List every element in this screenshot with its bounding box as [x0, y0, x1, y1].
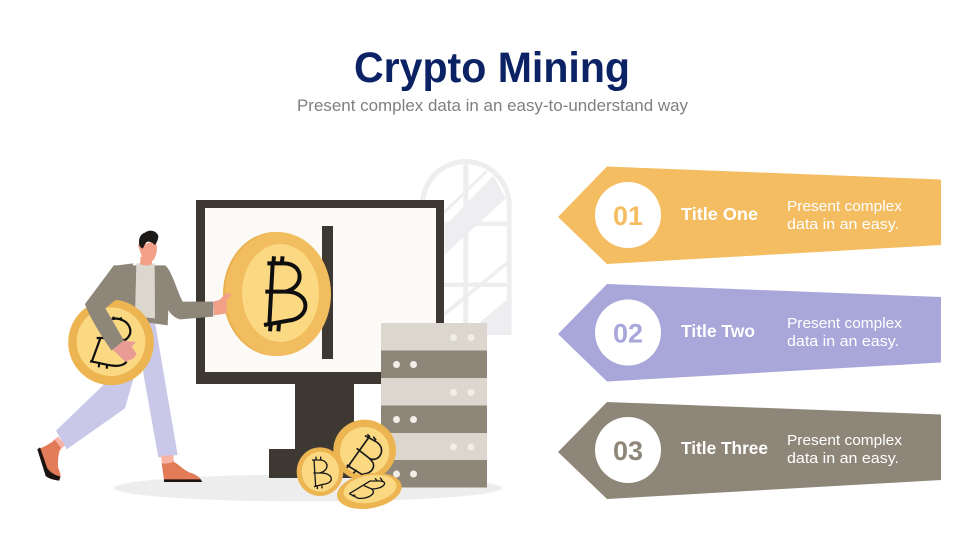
band 03 [558, 402, 941, 499]
flat coin [334, 468, 405, 514]
heading: Title Three [681, 438, 768, 458]
hand on coin [113, 341, 137, 362]
number: 02 [613, 318, 643, 348]
carried bitcoin coin [68, 299, 154, 385]
illustration: crypto mining scene [37, 159, 512, 514]
coin slot [322, 226, 333, 359]
title: Crypto Mining [354, 44, 630, 92]
number circle [595, 417, 661, 483]
number circle [595, 300, 661, 366]
torso jacket and arm pointing [110, 265, 213, 325]
ribbon arrow [558, 166, 941, 264]
pointing hand [213, 293, 232, 315]
ribbon arrow [558, 402, 941, 499]
server rack [381, 323, 487, 488]
front shoe [161, 455, 202, 482]
small upright coin [297, 447, 343, 496]
band 01 [558, 166, 941, 264]
subtitle: Present complex data in an easy-to-understand way [297, 96, 688, 115]
heading: Title One [681, 204, 758, 224]
description: Present complex [787, 316, 903, 332]
back shoe [37, 437, 65, 481]
left arm over coin [85, 263, 133, 351]
person carrying coin [37, 231, 232, 482]
large bitcoin coin [223, 232, 331, 356]
number: 03 [613, 436, 643, 466]
tall tilted coin [333, 420, 396, 480]
description: data in an easy. [787, 451, 899, 467]
number circle [595, 182, 661, 248]
computer monitor [196, 200, 444, 478]
number: 01 [613, 201, 643, 231]
ground shadow [114, 474, 502, 502]
description: data in an easy. [787, 217, 899, 233]
heading: Title Two [681, 321, 755, 341]
description: data in an easy. [787, 334, 899, 350]
background arched window [420, 159, 512, 335]
shirt [135, 263, 155, 318]
neck and head [138, 231, 158, 266]
description: Present complex [787, 433, 903, 449]
ribbon arrow [558, 284, 941, 382]
band 02 [558, 284, 941, 382]
description: Present complex [787, 199, 903, 215]
legs [56, 377, 134, 449]
pile of small coins [297, 420, 405, 514]
